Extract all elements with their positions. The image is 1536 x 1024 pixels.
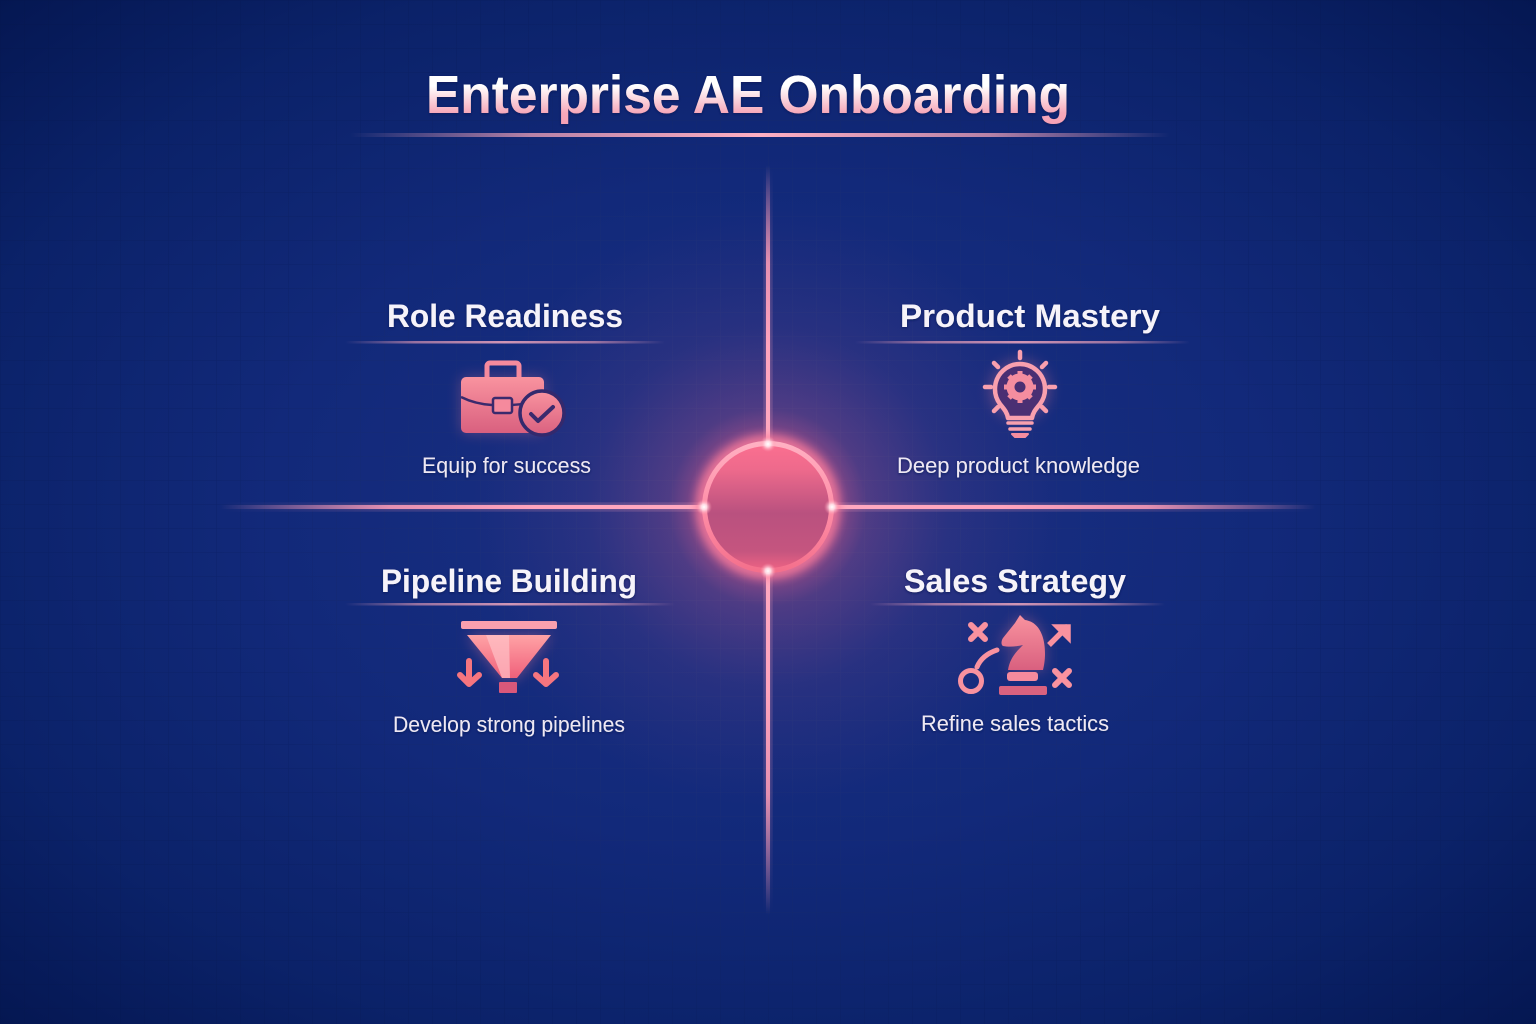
caption: role readiness: Equip for success xyxy=(422,453,591,478)
heading: role readiness: Role Readiness xyxy=(387,298,623,334)
caption: sales strategy: Refine sales tactics xyxy=(921,711,1109,736)
icon: briefcase with check xyxy=(461,363,564,435)
rule: role readiness xyxy=(345,341,665,344)
panel: pipeline building xyxy=(345,563,675,737)
icon: funnel with arrows xyxy=(460,621,557,693)
title underline xyxy=(350,133,1170,137)
central hub xyxy=(696,436,840,579)
rule: sales strategy xyxy=(870,603,1165,606)
cross axes xyxy=(220,165,1316,915)
panel: sales strategy xyxy=(870,563,1165,736)
heading: pipeline building: Pipeline Building xyxy=(381,563,637,599)
icon: chess knight with play marks xyxy=(960,615,1070,695)
heading: product mastery: Product Mastery xyxy=(900,298,1160,334)
panel: role readiness xyxy=(345,298,665,478)
icon: light bulb with gear xyxy=(985,352,1055,437)
central glow xyxy=(468,207,1068,807)
rule: pipeline building xyxy=(345,603,675,606)
caption: pipeline building: Develop strong pipelines xyxy=(393,712,625,737)
caption: product mastery: Deep product knowledge xyxy=(897,453,1140,478)
rule: product mastery xyxy=(855,341,1190,344)
title: Enterprise AE Onboarding xyxy=(426,65,1070,125)
panel: product mastery xyxy=(855,298,1190,478)
heading: sales strategy: Sales Strategy xyxy=(904,563,1126,599)
